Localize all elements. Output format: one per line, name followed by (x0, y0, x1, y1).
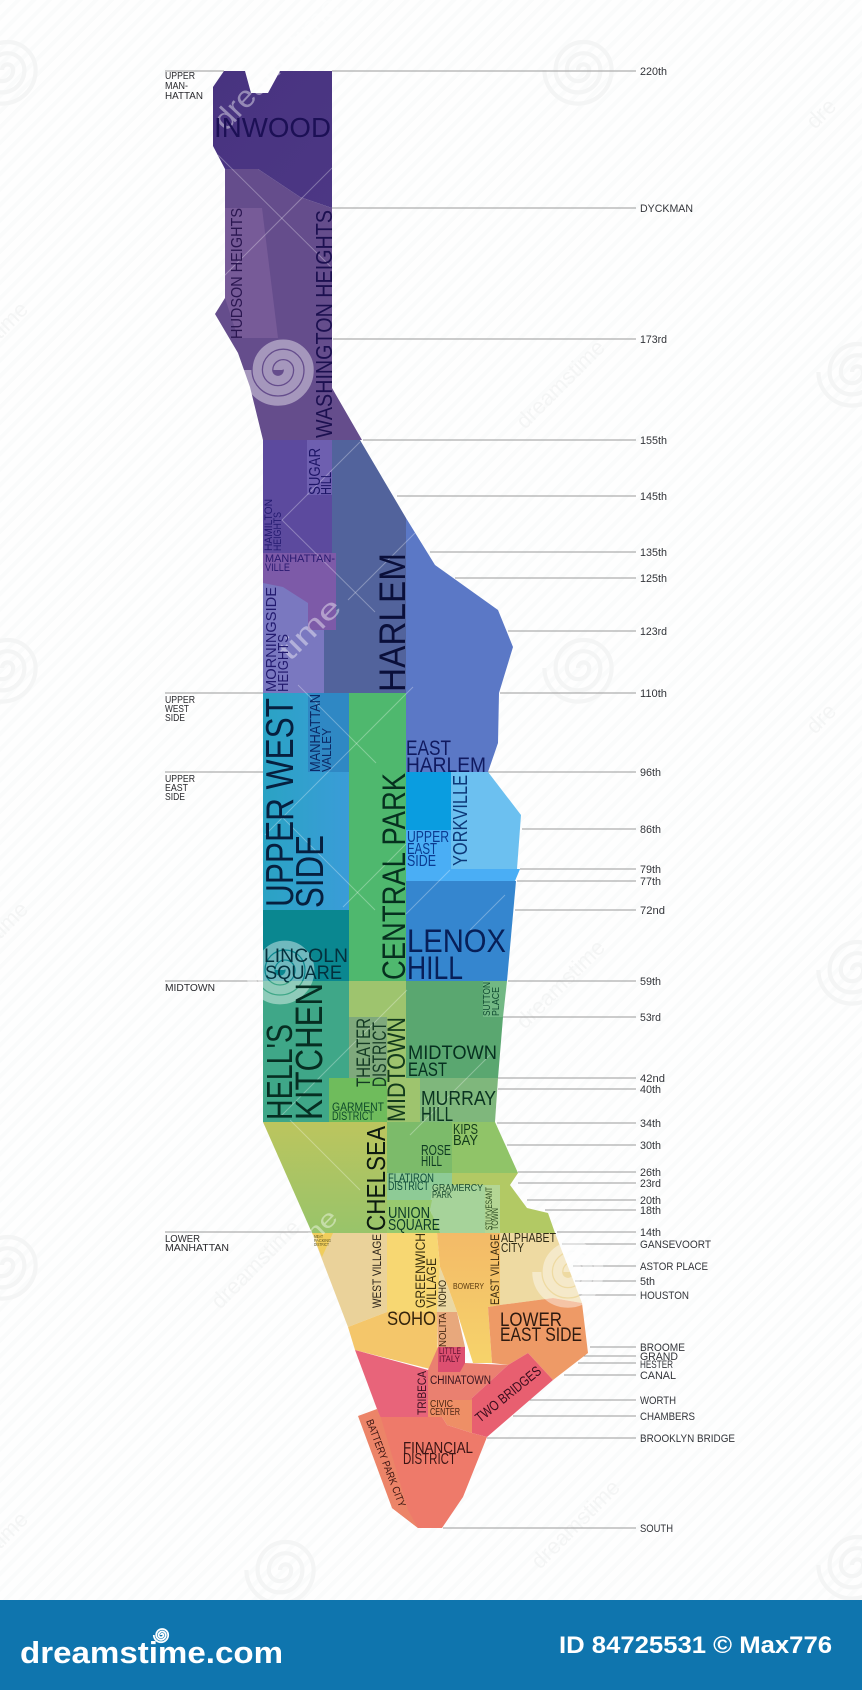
name: Theater District: DISTRICT (370, 1022, 391, 1087)
street labels on the right: 42nd (640, 1073, 665, 1085)
name: Rose Hill: HILL (421, 1153, 442, 1170)
region: Midtown (349, 981, 420, 1122)
region: Morningside Heights (263, 583, 324, 693)
street labels on the right: 30th (640, 1140, 661, 1152)
name: Meatpacking District (314, 1234, 331, 1247)
region: Gramercy Park (430, 1185, 485, 1233)
region: Chinatown (427, 1347, 508, 1400)
name: Greenwich Village (412, 1233, 439, 1308)
region: Lower East Side (488, 1298, 588, 1380)
region: Yorkville (451, 772, 521, 869)
neighborhood names (214, 112, 582, 1509)
name: Alphabet City: ALPHABET (501, 1230, 556, 1245)
name: Meatpacking District: PACKING (314, 1238, 331, 1243)
infographic canvas: dre (801, 93, 841, 134)
region: Little Italy (438, 1347, 465, 1372)
region: Manhattan Valley (308, 693, 349, 772)
region: Theater District (349, 1017, 387, 1088)
name: Hell's Kitchen (259, 983, 331, 1120)
name: Morningside Heights: HEIGHTS (275, 634, 292, 692)
name: Two Bridges: TWO BRIDGES (472, 1363, 544, 1425)
street labels on the right: 155th (640, 435, 667, 447)
name: Midtown East: EAST (408, 1060, 447, 1081)
name: East Village: EAST VILLAGE (488, 1234, 502, 1305)
region: Nolita (437, 1312, 465, 1347)
region: Union Square (387, 1200, 440, 1233)
name: Battery Park City: BATTERY PARK CITY (363, 1418, 408, 1509)
street labels on the right: ASTOR PLACE (640, 1261, 708, 1273)
name: Harlem: HARLEM (372, 553, 413, 692)
name: Garment District (332, 1100, 385, 1123)
street labels on the right: 53rd (640, 1012, 661, 1024)
region: Noho (437, 1267, 457, 1312)
name: East Harlem: EAST (406, 737, 451, 760)
street labels on the right: 23rd (640, 1178, 661, 1190)
street labels on the right: 14th (640, 1227, 661, 1239)
name: Rose Hill (421, 1142, 451, 1170)
region: East Harlem (406, 518, 513, 772)
name: Greenwich Village: VILLAGE (423, 1258, 439, 1308)
region: Harlem (324, 440, 406, 693)
street labels on the right: 20th (640, 1195, 661, 1207)
name: Morningside Heights: MORNINGSIDE (263, 587, 280, 692)
infographic canvas: dreamstime (526, 1475, 625, 1574)
street labels on the right: HOUSTON (640, 1290, 689, 1302)
name: Murray Hill: HILL (421, 1104, 453, 1126)
name: Hamilton Heights (263, 499, 284, 551)
name: Kips Bay: BAY (453, 1132, 478, 1149)
name: Noho: NOHO (437, 1280, 449, 1307)
name: Stuyvesant Town: STUYVESANT (484, 1187, 494, 1230)
name: Morningside Heights (263, 587, 292, 692)
name: Alphabet City: CITY (501, 1240, 524, 1255)
name: Lincoln Square: LINCOLN (264, 946, 348, 967)
name: Bowery: BOWERY (453, 1281, 484, 1291)
name: Theater District (354, 1018, 391, 1087)
region: Two Bridges (472, 1353, 553, 1437)
region: Hamilton Heights (263, 440, 332, 553)
name: Murray Hill (421, 1088, 496, 1126)
name: Hamilton Heights: HAMILTON (263, 499, 275, 551)
name: Sutton Place: PLACE (491, 987, 502, 1016)
street labels on the right: 40th (640, 1084, 661, 1096)
name: Soho: SOHO (387, 1309, 436, 1330)
street labels on the right: BROOME (640, 1342, 685, 1354)
name: Stuyvesant Town (484, 1187, 500, 1230)
region: Sugar Hill (307, 440, 332, 495)
name: Flatiron District: DISTRICT (388, 1179, 429, 1193)
name: Manhattan Valley: VALLEY (319, 728, 334, 772)
street labels on the right: 135th (640, 547, 667, 559)
watermark lines over the map (218, 155, 505, 1190)
region: Washington Heights (215, 168, 362, 440)
street labels on the right: 79th (640, 864, 661, 876)
region: Chelsea (263, 1122, 387, 1233)
region: Inwood (213, 71, 332, 208)
name: Financial District: DISTRICT (403, 1451, 456, 1468)
name: Manhattanville: MANHATTAN- (265, 553, 335, 565)
street labels on the right: CANAL (640, 1370, 676, 1382)
name: Upper West Side (259, 698, 332, 908)
region: Rose Hill (387, 1122, 452, 1173)
name: Sugar Hill (307, 448, 335, 495)
street labels on the right: CHAMBERS (640, 1411, 695, 1423)
name: Chelsea: CHELSEA (361, 1125, 391, 1231)
region: Murray Hill (420, 1078, 498, 1122)
street labels on the right: WORTH (640, 1395, 676, 1407)
name: Hamilton Heights: HEIGHTS (272, 512, 284, 551)
name: Upper West Side: SIDE (289, 835, 332, 908)
district labels on the left: WEST (165, 703, 189, 715)
name: Murray Hill: MURRAY (421, 1088, 496, 1110)
street labels on the right: 86th (640, 824, 661, 836)
region: Soho (348, 1312, 438, 1371)
name: Garment District: GARMENT (332, 1100, 385, 1114)
name: Rose Hill: ROSE (421, 1142, 451, 1159)
name: Hell's Kitchen: KITCHEN (289, 983, 331, 1120)
name: Union Square (388, 1205, 440, 1234)
map of Manhattan neighborhoods (213, 71, 588, 1528)
region: Garment District (329, 1078, 387, 1122)
footer bar (0, 1600, 862, 1690)
name: Manhattanville: VILLE (265, 562, 290, 574)
name: Upper East Side: EAST (407, 841, 437, 858)
street labels on the right: HESTER (640, 1359, 673, 1371)
name: Upper West Side: UPPER WEST (259, 698, 302, 907)
name: Kips Bay: KIPS (453, 1121, 478, 1138)
name: Midtown East: MIDTOWN (408, 1043, 497, 1064)
name: Stuyvesant Town: TOWN (490, 1208, 500, 1230)
name: Washington Heights: WASHINGTON HEIGHTS (311, 210, 337, 438)
name: Gramercy Park: PARK (432, 1189, 452, 1201)
region: Civic Center (428, 1400, 472, 1433)
street labels on the right: GANSEVOORT (640, 1239, 711, 1251)
name: Flatiron District (388, 1171, 434, 1193)
name: Financial District: FINANCIAL (403, 1440, 473, 1457)
street labels on the right: SOUTH (640, 1523, 673, 1535)
region: Lincoln Square (263, 910, 349, 981)
street labels on the right: 96th (640, 767, 661, 779)
district labels on the left: MANHATTAN (165, 1242, 229, 1254)
name: Lower East Side: EAST SIDE (500, 1325, 582, 1346)
region: Stuyvesant area (432, 1173, 555, 1233)
name: Chinatown: CHINATOWN (430, 1375, 491, 1387)
infographic canvas: dre (801, 698, 841, 739)
street labels on the right: GRAND (640, 1351, 678, 1363)
watermark text over the map: time (272, 591, 347, 666)
region: Upper East Side bright block (406, 772, 451, 830)
watermark spirals over the map (247, 344, 599, 1303)
name: Little Italy: LITTLE (439, 1346, 461, 1357)
name: Hell's Kitchen: HELL'S (259, 1024, 300, 1120)
name: Greenwich Village: GREENWICH (412, 1233, 428, 1308)
street labels on the right: 123rd (640, 626, 667, 638)
region: Midtown East (406, 981, 503, 1078)
street labels on the right: BROOKLYN BRIDGE (640, 1433, 735, 1445)
street labels on the right: 220th (640, 66, 667, 78)
region: Financial District (380, 1417, 487, 1528)
name: Financial District (403, 1440, 473, 1468)
name: Upper East Side: UPPER (407, 829, 449, 846)
region: Hell's Kitchen (263, 981, 349, 1122)
name: Manhattan Valley: MANHATTAN (307, 694, 324, 772)
name: Gramercy Park (432, 1182, 483, 1201)
name: Manhattan Valley (307, 694, 334, 772)
street labels on the right: 77th (640, 876, 661, 888)
region: West Village (312, 1233, 387, 1327)
name: Little Italy: ITALY (439, 1354, 461, 1365)
name: Lincoln Square: SQUARE (265, 963, 342, 984)
district labels on the left: LOWER (165, 1233, 200, 1245)
footer image credit: ID 84725531 © Max776 (559, 1632, 832, 1659)
street labels on the right: 59th (640, 976, 661, 988)
name: Meatpacking District: MEAT (314, 1234, 323, 1239)
name: Yorkville: YORKVILLE (450, 775, 472, 866)
name: West Village: WEST VILLAGE (370, 1234, 384, 1308)
region: Hudson Heights (225, 208, 278, 338)
name: Sutton Place: SUTTON (482, 982, 493, 1016)
name: Lenox Hill: LENOX (407, 923, 506, 959)
region: Upper East Side (406, 830, 520, 881)
name: Hudson Heights: HUDSON HEIGHTS (229, 208, 246, 339)
region: Greenwich Village (387, 1233, 440, 1312)
region: Lenox Hill (406, 881, 516, 981)
name: Civic Center: CENTER (430, 1407, 460, 1418)
region: Flatiron District (387, 1173, 452, 1200)
name: Union Square: SQUARE (388, 1217, 440, 1234)
street labels on the right: 110th (640, 688, 667, 700)
name: Flatiron District: FLATIRON (388, 1171, 434, 1185)
name: Manhattanville (265, 553, 335, 574)
district labels on the left: SIDE (165, 791, 185, 803)
region: Stuyvesant Town (485, 1185, 500, 1233)
name: Theater District: THEATER (354, 1018, 375, 1087)
name: Sugar Hill: SUGAR (307, 448, 324, 495)
district labels on the left: EAST (165, 782, 188, 794)
name: Midtown: MIDTOWN (383, 1017, 411, 1122)
watermark text over the map (207, 0, 347, 1254)
region: Bowery and East Village (437, 1233, 500, 1363)
name: Union Square: UNION (388, 1205, 430, 1222)
district labels on the left: HATTAN (165, 90, 203, 102)
street labels on the right: 18th (640, 1205, 661, 1217)
street labels on the right: 72nd (640, 905, 665, 917)
name: East Harlem: HARLEM (406, 754, 486, 777)
street labels on the right: 26th (640, 1167, 661, 1179)
name: Meatpacking District: DISTRICT (314, 1242, 329, 1247)
district labels on the left: UPPER (165, 773, 195, 785)
infographic canvas: dreamstime (511, 335, 610, 434)
name: Gramercy Park: GRAMERCY (432, 1182, 483, 1194)
watermark text over the map: me (293, 1204, 343, 1254)
name: Tribeca: TRIBECA (417, 1371, 429, 1415)
region: Battery Park City (358, 1409, 418, 1528)
region: Central Park (349, 693, 406, 981)
infographic canvas: dreamstime (206, 1215, 305, 1314)
name: Kips Bay (453, 1121, 478, 1149)
street labels on the right: 173rd (640, 334, 667, 346)
name: Lincoln Square (264, 946, 348, 984)
region: Kips Bay (452, 1122, 518, 1173)
name: Central Park: CENTRAL PARK (376, 773, 412, 980)
name: Nolita: NOLITA (437, 1313, 449, 1347)
name: Civic Center: CIVIC (430, 1399, 453, 1410)
district labels on the left: UPPER (165, 694, 195, 706)
district labels on the left (165, 70, 229, 1254)
district labels on the left: SIDE (165, 712, 185, 724)
name: Lower East Side (500, 1310, 582, 1346)
region: Tribeca (355, 1350, 428, 1417)
name: Alphabet City (501, 1230, 556, 1255)
name: Little Italy (439, 1346, 461, 1365)
street labels on the right: DYCKMAN (640, 203, 693, 215)
name: Midtown East (408, 1043, 497, 1081)
street labels on the right: 145th (640, 491, 667, 503)
name: Upper East Side: SIDE (407, 853, 436, 870)
district labels on the left: UPPER (165, 70, 195, 82)
name: Garment District: DISTRICT (332, 1109, 374, 1123)
footer logo: dreamstime.com (20, 1635, 283, 1670)
infographic canvas: dreamstime (511, 935, 610, 1034)
street connector lines (165, 71, 636, 1528)
district labels on the left: MAN- (165, 80, 188, 92)
region: Sutton Place (483, 981, 507, 1017)
name: Sugar Hill: HILL (318, 472, 335, 495)
region: Meatpacking District (312, 1233, 333, 1257)
name: Civic Center (430, 1399, 460, 1418)
region: Manhattanville (263, 553, 336, 693)
street labels on the right: 5th (640, 1276, 655, 1288)
region: Alphabet City (500, 1233, 582, 1305)
name: Lenox Hill (407, 923, 506, 986)
name: Inwood: INWOOD (214, 112, 331, 143)
street labels on the right: 34th (640, 1118, 661, 1130)
district labels on the left: MIDTOWN (165, 982, 215, 994)
region: Upper West Side (263, 693, 349, 910)
watermark text over the map: dreamstime (207, 0, 347, 137)
street labels on the right: 125th (640, 573, 667, 585)
name: Sutton Place (482, 982, 502, 1016)
name: Upper East Side (407, 829, 449, 870)
street labels on the right (640, 66, 735, 1535)
name: East Harlem (406, 737, 486, 777)
name: Lenox Hill: HILL (407, 950, 463, 986)
name: Lower East Side: LOWER (500, 1310, 562, 1331)
